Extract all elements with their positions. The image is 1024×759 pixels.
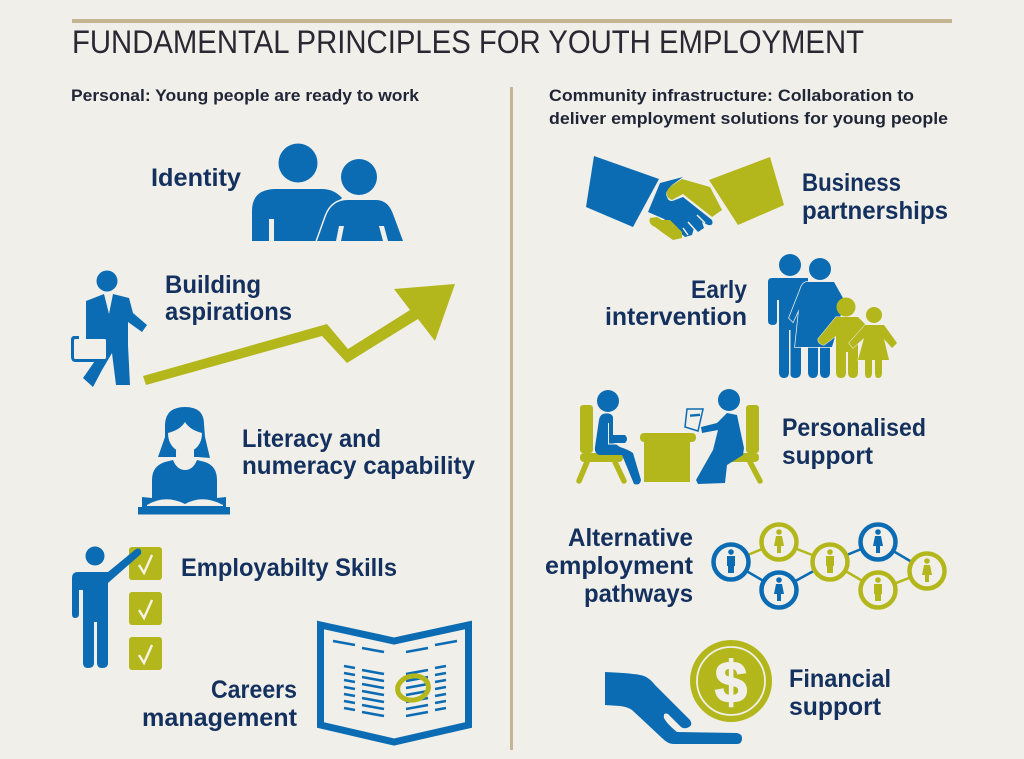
- label: literacy and numeracy capability: Literacy and: [242, 425, 381, 453]
- label: alternative employment pathways: Alternative: [568, 524, 693, 552]
- heading: personal: Personal: Young people are ready to work: [71, 86, 420, 105]
- label: identity: Identity: [151, 164, 241, 192]
- label: careers management: management: [142, 704, 298, 732]
- label: careers management: [142, 676, 298, 732]
- label: early intervention: Early: [691, 276, 747, 304]
- panel: personal: [71, 86, 475, 742]
- icon: reading woman: [138, 407, 230, 514]
- icon: checklist boxes: [129, 547, 162, 670]
- label: early intervention: [605, 276, 747, 331]
- panel: community infrastructure: [545, 86, 948, 744]
- icon: hand with coin: [605, 640, 772, 744]
- label: building aspirations: [165, 271, 292, 326]
- label: personalised support: Personalised: [782, 414, 926, 442]
- arrow: rising growth: [143, 284, 455, 385]
- diagram: people network: [714, 524, 944, 608]
- label: business partnerships: partnerships: [802, 197, 948, 225]
- label: business partnerships: Business: [802, 169, 901, 197]
- label: alternative employment pathways: employment: [545, 552, 694, 580]
- icon: two people: [252, 144, 410, 245]
- heading: community infrastructure: [549, 86, 948, 128]
- label: financial support: support: [789, 693, 882, 721]
- icon: businessman: [71, 270, 147, 387]
- heading: community infrastructure: Community infrastructure: Collaboration to: [549, 86, 914, 105]
- label: alternative employment pathways: [545, 524, 694, 608]
- label: employability skills: Employabilty Skills: [181, 554, 397, 582]
- label: personalised support: support: [782, 442, 874, 470]
- icon: person pointing: [72, 546, 141, 668]
- label: early intervention: intervention: [605, 303, 747, 331]
- label: financial support: Financial: [789, 665, 891, 693]
- heading: community infrastructure: deliver employment solutions for young people: [549, 109, 948, 128]
- icon: family: [768, 254, 897, 378]
- label: careers management: Careers: [211, 676, 297, 704]
- label: building aspirations: aspirations: [165, 298, 292, 326]
- label: literacy and numeracy capability: [242, 425, 475, 480]
- icon: meeting at desk: [579, 389, 760, 484]
- label: alternative employment pathways: pathways: [584, 580, 693, 608]
- label: business partnerships: [802, 169, 948, 225]
- label: literacy and numeracy capability: numeracy capability: [242, 452, 475, 480]
- icon: newspaper: [320, 625, 468, 742]
- label: financial support: [789, 665, 891, 721]
- label: personalised support: [782, 414, 926, 470]
- icon: hand with coin: $: [715, 650, 747, 715]
- title: FUNDAMENTAL PRINCIPLES FOR YOUTH EMPLOYMENT: [72, 24, 864, 60]
- label: building aspirations: Building: [165, 271, 261, 299]
- icon: handshake: [586, 156, 784, 240]
